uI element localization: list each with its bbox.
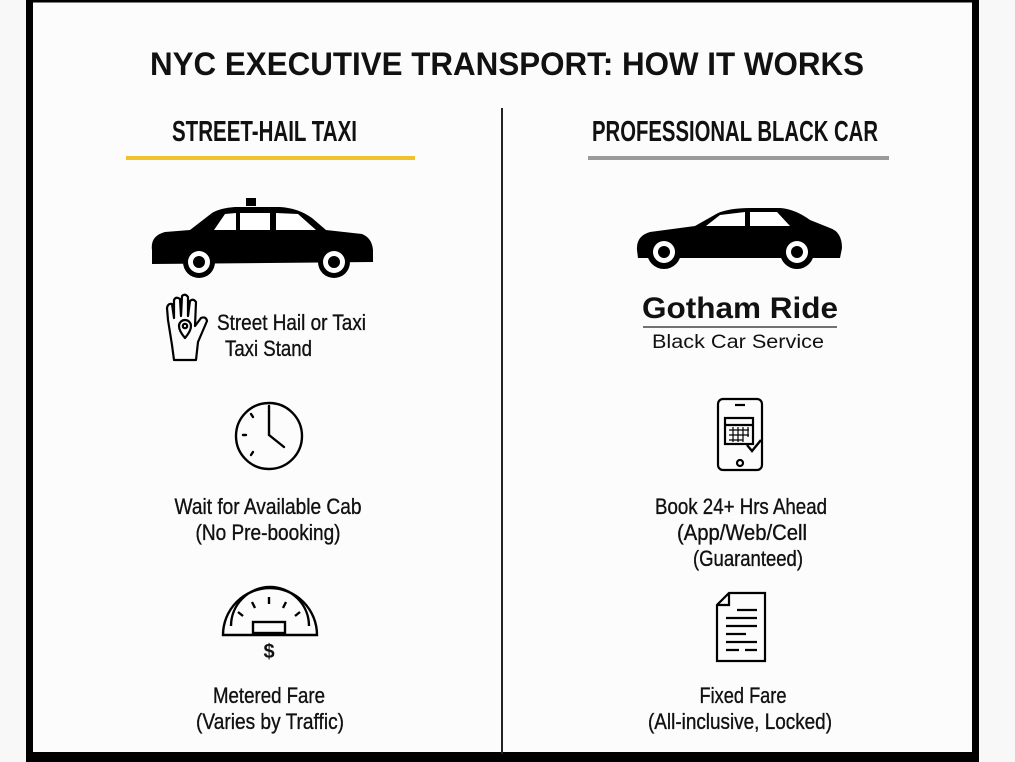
text: book ahead: (Guaranteed) bbox=[693, 546, 803, 571]
text: street hail: Street Hail or Taxi bbox=[217, 310, 366, 335]
divider bbox=[501, 108, 503, 754]
text: metered fare bbox=[196, 683, 344, 734]
icon: hand with pin bbox=[167, 295, 207, 360]
panel: street-hail taxi bbox=[126, 116, 415, 734]
text: street hail bbox=[217, 310, 366, 361]
text: fixed fare bbox=[648, 683, 832, 734]
text: metered fare: Metered Fare bbox=[213, 683, 325, 708]
panel: professional black car bbox=[588, 116, 889, 734]
logo: gotham ride: Gotham Ride bbox=[642, 292, 838, 325]
text: book ahead: (App/Web/Cell bbox=[677, 520, 807, 545]
icon: dollar: $ bbox=[263, 641, 275, 663]
icon: phone calendar bbox=[718, 399, 762, 470]
text: metered fare: (Varies by Traffic) bbox=[196, 709, 344, 734]
icon: taxi car bbox=[152, 198, 373, 278]
logo: gotham ride: Black Car Service bbox=[652, 332, 824, 353]
logo: gotham ride bbox=[642, 292, 838, 353]
heading: black car: PROFESSIONAL BLACK CAR bbox=[592, 116, 878, 148]
text: wait: Wait for Available Cab bbox=[174, 494, 362, 519]
icon: meter bbox=[223, 587, 317, 635]
text: street hail: Taxi Stand bbox=[225, 336, 312, 361]
heading: street-hail taxi: STREET-HAIL TAXI bbox=[172, 116, 357, 148]
title: NYC EXECUTIVE TRANSPORT: HOW IT WORKS bbox=[150, 46, 864, 82]
text: book ahead: Book 24+ Hrs Ahead bbox=[655, 494, 827, 519]
icon: black car bbox=[637, 208, 842, 269]
text: fixed fare: (All-inclusive, Locked) bbox=[648, 709, 832, 734]
text: book ahead bbox=[655, 494, 827, 571]
heading: street-hail taxi bbox=[126, 116, 415, 160]
icon: document bbox=[717, 593, 765, 661]
text: fixed fare: Fixed Fare bbox=[700, 683, 786, 708]
heading: black car bbox=[588, 116, 889, 160]
text: wait: (No Pre-booking) bbox=[196, 520, 340, 545]
text: wait bbox=[174, 494, 362, 545]
icon: clock bbox=[236, 403, 302, 469]
